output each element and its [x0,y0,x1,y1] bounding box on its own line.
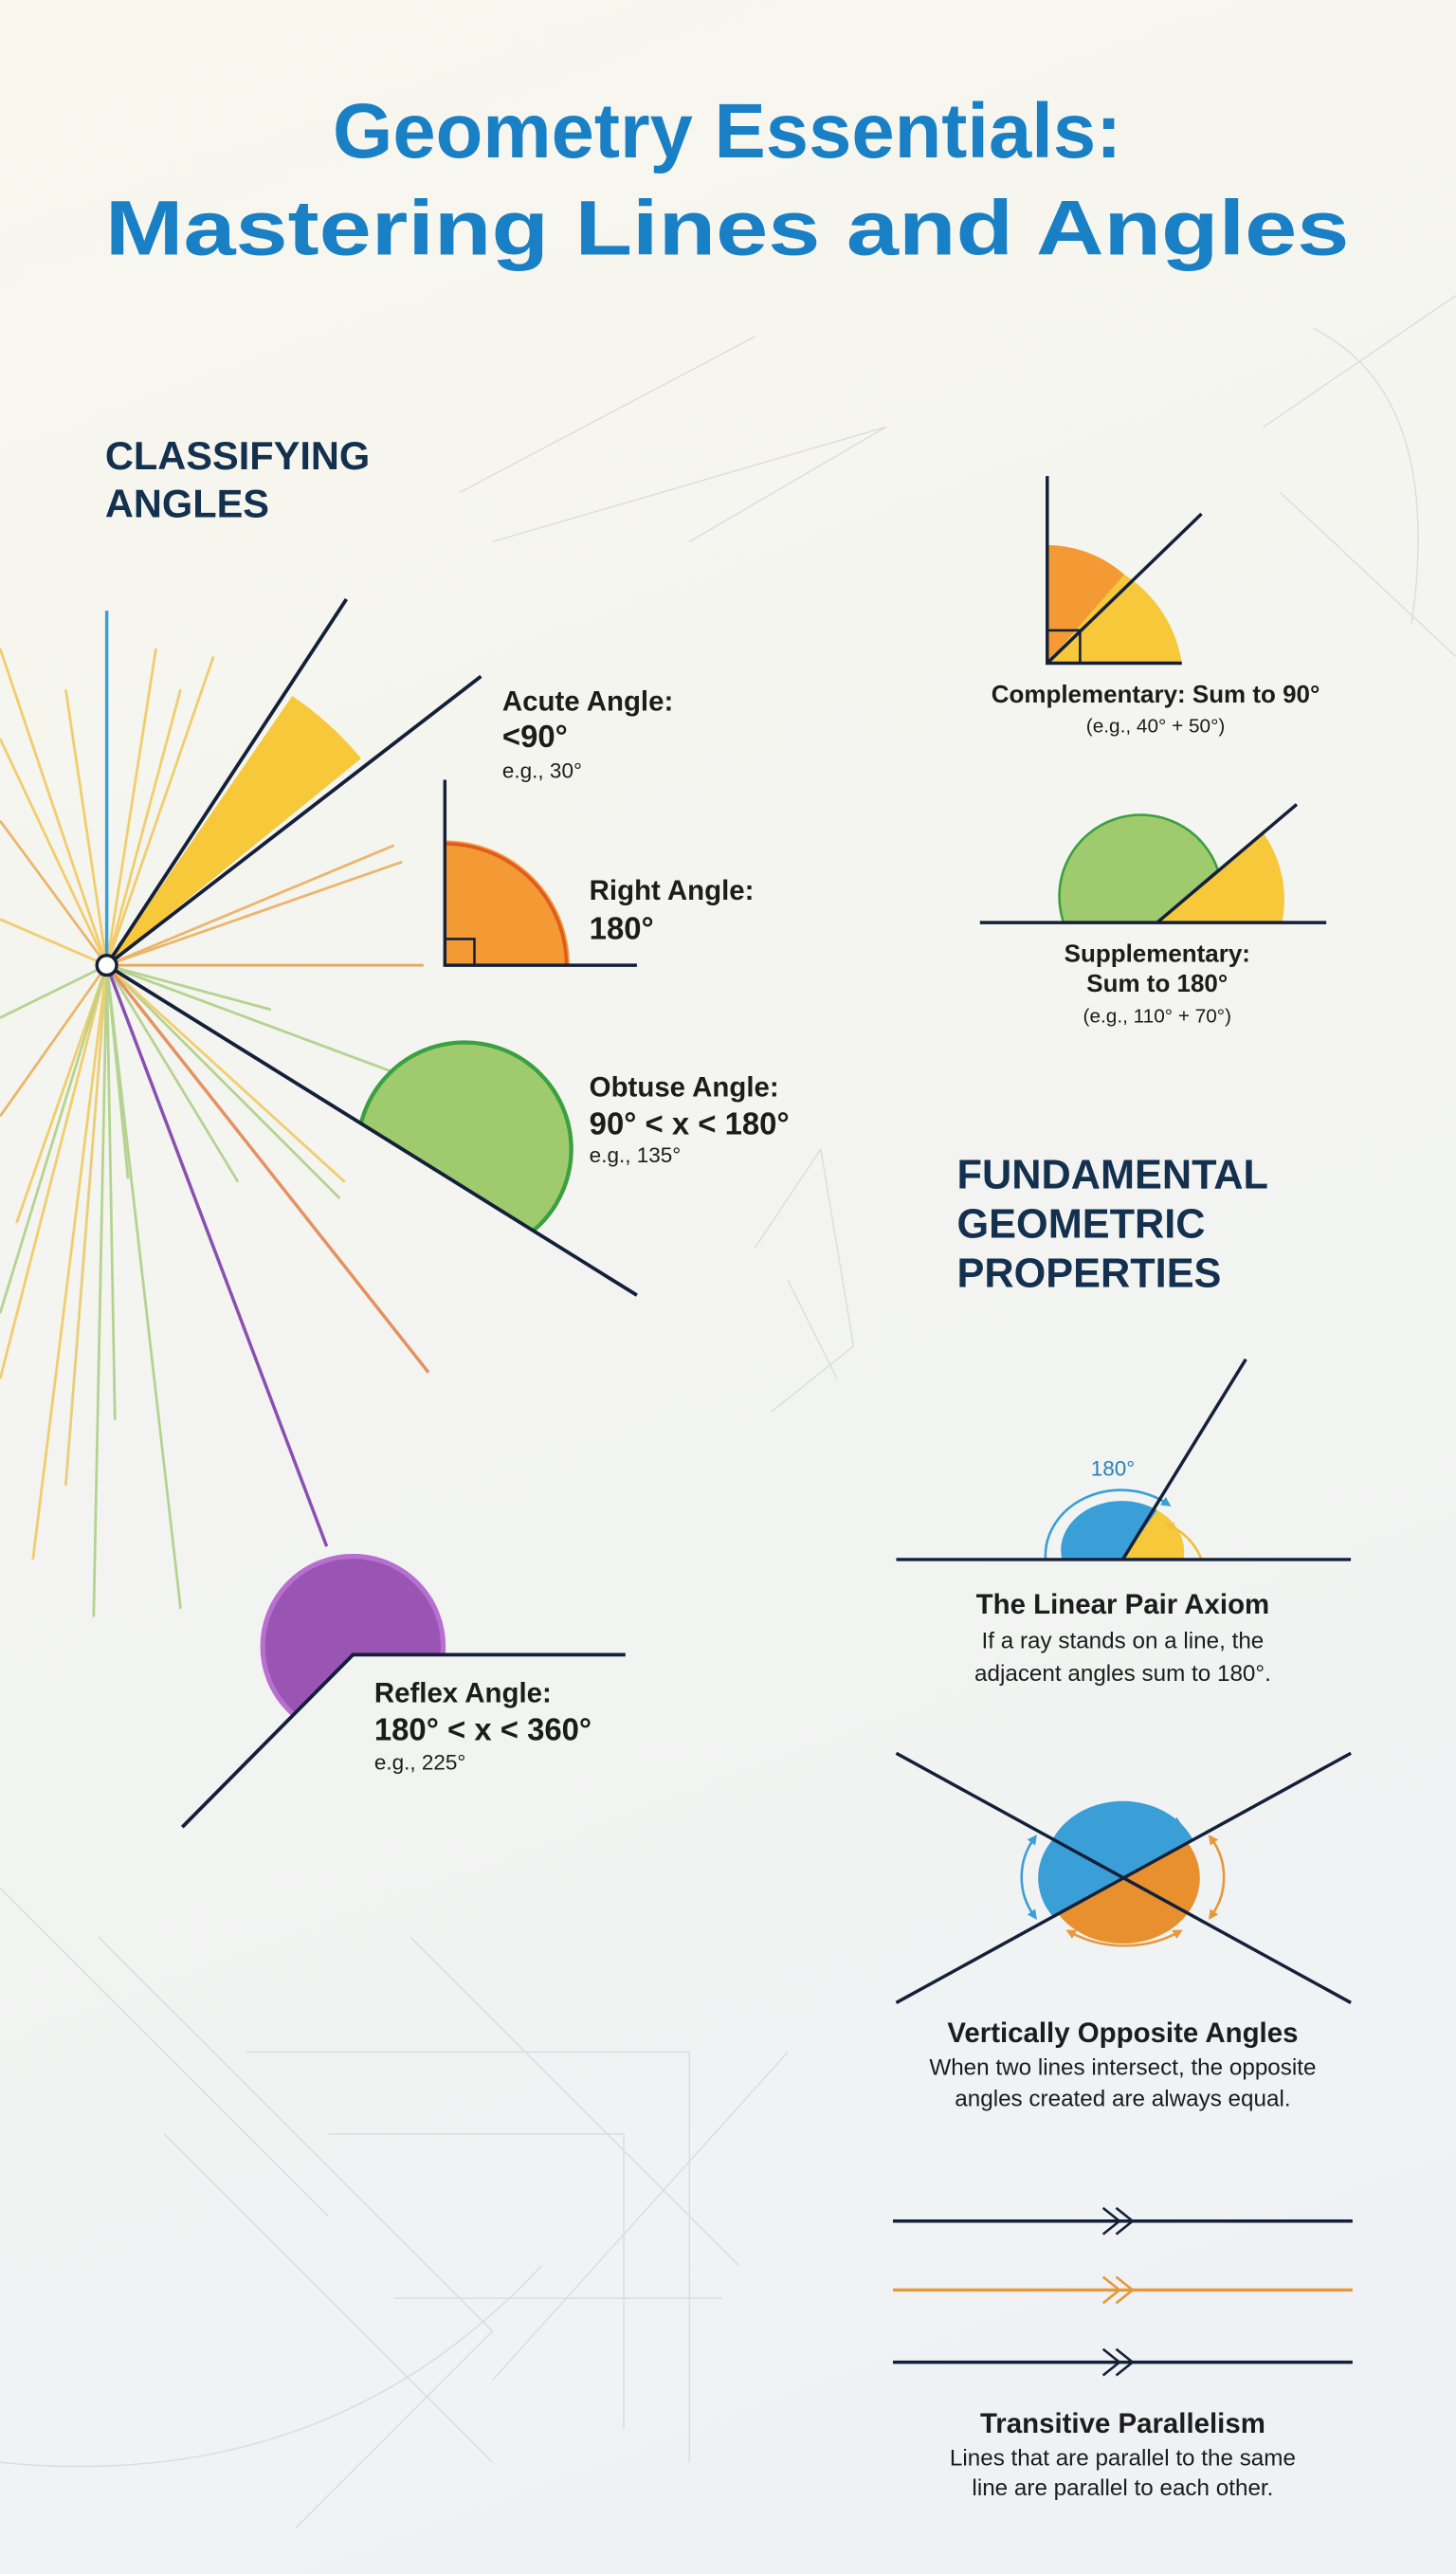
linear pair text: The Linear Pair Axiom [976,1589,1269,1620]
vertically opposite diagram [896,1753,1351,2002]
complementary label: Complementary: Sum to 90° [992,680,1320,708]
heading: classifying angles: CLASSIFYING [105,433,370,478]
right angle label: 180° [590,910,654,945]
right angle label: Right Angle: [590,875,754,906]
acute label: <90° [502,719,568,754]
complementary label: (e.g., 40° + 50°) [1086,715,1225,737]
title [105,88,1349,271]
linear pair diagram [896,1360,1351,1560]
acute label: e.g., 30° [502,759,582,783]
obtuse label: 90° < x < 180° [590,1105,790,1141]
reflex angle [182,1556,626,1827]
parallel lines diagram [893,2208,1353,2375]
reflex label: e.g., 225° [374,1751,465,1775]
supplementary label: Supplementary: [1065,940,1250,968]
reflex label [374,1678,592,1775]
vertically opposite text: When two lines intersect, the opposite [929,2055,1317,2081]
acute label: Acute Angle: [502,686,673,718]
transitive parallelism text: line are parallel to each other. [972,2475,1273,2501]
heading: fundamental geometric properties: FUNDAMENTAL [957,1153,1268,1198]
linear pair text: If a ray stands on a line, the [982,1628,1264,1653]
right angle [445,779,637,965]
obtuse label: e.g., 135° [590,1143,681,1167]
vertically opposite text: Vertically Opposite Angles [947,2017,1298,2049]
transitive parallelism text: Lines that are parallel to the same [950,2446,1296,2472]
purple ray [107,965,327,1546]
right angle label [590,875,754,945]
acute label [502,686,673,783]
heading: fundamental geometric properties: PROPERTIES [957,1250,1221,1296]
title: Geometry Essentials: [333,88,1121,174]
obtuse label: Obtuse Angle: [590,1072,779,1104]
vertically opposite text [929,2017,1317,2112]
supplementary label [1065,940,1250,1028]
linear pair diagram: 180° [1091,1457,1135,1481]
heading: classifying angles [105,433,370,525]
linear pair text [974,1589,1271,1687]
heading: fundamental geometric properties: GEOMETRIC [957,1202,1206,1248]
obtuse label [590,1072,790,1167]
ray fan [0,648,428,1617]
transitive parallelism text: Transitive Parallelism [980,2408,1265,2439]
vertically opposite text: angles created are always equal. [955,2087,1291,2112]
supplementary label: (e.g., 110° + 70°) [1083,1006,1231,1028]
linear pair text: adjacent angles sum to 180°. [974,1661,1271,1687]
transitive parallelism text [950,2408,1296,2501]
complementary label [992,680,1320,737]
reflex label: Reflex Angle: [374,1678,552,1709]
supplementary diagram [980,804,1326,922]
acute angle [107,599,481,965]
complementary diagram [1047,476,1202,664]
heading: fundamental geometric properties [957,1153,1268,1297]
reflex label: 180° < x < 360° [374,1711,592,1746]
heading: classifying angles: ANGLES [105,481,269,525]
obtuse angle [107,965,637,1295]
supplementary label: Sum to 180° [1086,969,1228,997]
title: Mastering Lines and Angles [105,185,1349,271]
